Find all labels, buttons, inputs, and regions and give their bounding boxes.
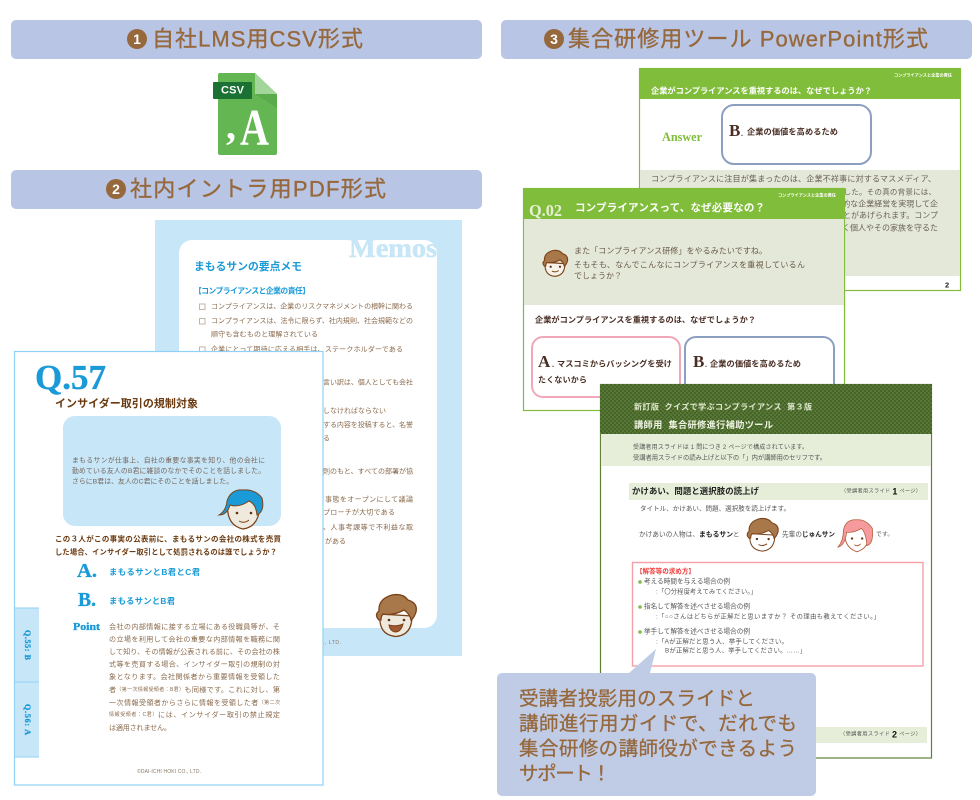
memo checklist xyxy=(200,302,413,546)
slide number: Q.02 xyxy=(529,201,562,220)
callout xyxy=(497,649,816,796)
page number: 2 xyxy=(945,280,949,290)
panel: memo page xyxy=(155,220,462,656)
point explanation: して知り、その情報が公表される前に、その会社の株 xyxy=(109,647,280,656)
explanation band xyxy=(640,170,960,276)
icon: woman with blue hair xyxy=(219,490,263,529)
choice B box: . xyxy=(705,360,707,369)
choice A: まもるサンとB君とC君 xyxy=(109,567,200,577)
memo checklist: 順守も含むものと理解されている xyxy=(211,330,318,338)
choice B: B. xyxy=(78,589,96,611)
slide question: 企業がコンプライアンスを重視するのは、なぜでしょうか？ xyxy=(651,86,872,96)
dialogue band xyxy=(524,219,844,305)
scenario box: さらにB君は、友人のC君にそのことを話しました。 xyxy=(72,476,233,486)
memo checklist: する内容を投稿すると、名誉 xyxy=(323,420,413,429)
guide header: 新訂版 クイズで学ぶコンプライアンス 第３版 xyxy=(634,402,812,412)
copyright: ©DAI-ICHI HOKI CO., LTD. xyxy=(137,768,201,775)
characters sentence: 先輩の xyxy=(782,530,802,538)
icon: CSV file: A xyxy=(240,100,269,157)
icon: boy face xyxy=(376,595,416,636)
memo checklist: 、人事考課等で不利益な取 xyxy=(323,522,413,532)
answer tab Q56 xyxy=(15,682,39,757)
memo checklist: 企業にとって期待に応える相手は、ステークホルダーである xyxy=(211,344,403,354)
question text xyxy=(55,534,282,556)
answer method box xyxy=(632,562,923,666)
section row xyxy=(629,483,928,500)
explanation band: コンプライアンスに注目が集まったのは、企業不祥事に対するマスメディア、 xyxy=(651,174,936,184)
point explanation: 式等を売買する場合、インサイダー取引の規制の対 xyxy=(109,660,280,668)
answer tab Q55 xyxy=(15,608,39,682)
callout: 講師進行用ガイドで、だれでも xyxy=(519,713,797,735)
question text: この３人がこの事実の公表前に、まもるサンの会社の株式を売買 xyxy=(55,534,282,544)
characters sentence: かけあいの人物は、 xyxy=(639,530,699,538)
question text: した場合、インサイダー取引として処罰されるのは誰でしょうか？ xyxy=(55,548,277,556)
answer tab Q56: Q.56: A xyxy=(23,704,32,735)
point label: Point xyxy=(73,621,100,633)
question title: インサイダー取引の規制対象 xyxy=(55,396,198,410)
second section row: （受講者用スライド 2 ページ） xyxy=(840,730,921,740)
memo title: まもるサンの要点メモ xyxy=(194,259,302,273)
guide intro band xyxy=(601,434,931,466)
point explanation: 会社の内部情報に接する立場にある役職員等が、そ xyxy=(109,622,280,631)
memo checklist: 則のもと、すべての部署が協 xyxy=(323,466,413,476)
heading: 2 intranet PDF format: 社内イントラ用PDF形式 xyxy=(130,176,386,202)
point explanation: は適用されません。 xyxy=(109,723,171,732)
answer method box: :「Aが正解だと思う人、挙手してください。 xyxy=(656,636,788,646)
choice B box: B xyxy=(693,352,704,371)
icon: CSV file: , xyxy=(226,103,236,148)
choice A box xyxy=(532,337,680,397)
second section row xyxy=(629,727,927,743)
memo checklist: る xyxy=(323,434,330,442)
answer method box: 【解答等の求め方】 xyxy=(636,566,695,576)
memo checklist: 事態をオープンにして議論 xyxy=(325,494,413,504)
icon: mamoru face xyxy=(747,518,778,551)
memo checklist: しなければならない xyxy=(323,406,386,415)
point explanation: 一次情報受領者からさらに情報を受領した者（第二次 xyxy=(109,698,280,707)
guide intro band: 受講者用スライドの読み上げと以下の「」内が講師用のセリフです。 xyxy=(633,452,826,462)
panel: instructor guide page xyxy=(600,384,932,758)
choice A: A. xyxy=(77,560,97,582)
choice A xyxy=(77,560,200,582)
memo checklist: プローチが大切である xyxy=(323,508,395,516)
answer method box: Bが正解だと思う人、挙手してください。……」 xyxy=(665,646,806,654)
scenario box xyxy=(63,416,281,526)
point explanation: 情報受領者：C君）には、インサイダー取引の禁止規定 xyxy=(109,710,280,719)
explanation band: く個人やその家族を守るた xyxy=(842,222,938,232)
question number: Q.57 xyxy=(35,358,106,397)
callout: 受講者投影用のスライドと xyxy=(519,688,755,710)
memo checklist: 言い訳は、個人としても会社 xyxy=(323,378,413,386)
panel: Q57 quiz page xyxy=(14,352,323,785)
memo checklist: コンプライアンスは、企業のリスクマネジメントの根幹に関わる xyxy=(211,302,413,310)
answer method box: 考える時間を与える場合の例 xyxy=(644,576,730,586)
memo copyright: ., LTD. xyxy=(323,640,341,646)
dialogue band: また「コンプライアンス研修」をやるみたいですね。 xyxy=(574,246,767,256)
explanation band: 消費者、投資家などからの批判が高まったことがありました。その真の背景には、 xyxy=(651,186,936,196)
choice A box: . xyxy=(552,360,554,369)
point explanation: 象となります。会社関係者から重要情報を受領した xyxy=(109,672,280,681)
panel: question slide xyxy=(523,188,845,410)
answer box: . xyxy=(741,129,743,138)
slide title: コンプライアンスって、なぜ必要なの？ xyxy=(575,201,765,214)
answer tab Q55: Q.55: B xyxy=(23,630,32,661)
answer method box: 挙手して解答を述べさせる場合の例 xyxy=(644,626,750,636)
slide question: 企業がコンプライアンスを重視するのは、なぜでしょうか？ xyxy=(535,314,756,324)
memos watermark: Memos xyxy=(349,233,437,263)
memo section heading: 【コンプライアンスと企業の責任】 xyxy=(194,286,310,296)
choice A box: A xyxy=(538,352,551,371)
icon: CSV file: CSV xyxy=(221,84,245,96)
point explanation: の立場を利用して会社の重要な内部情報を職務に関 xyxy=(109,634,280,644)
guide instructions: タイトル、かけあい、問題、選択肢を読上げます。 xyxy=(640,504,790,512)
dialogue band: でしょうか？ xyxy=(574,272,622,280)
answer method box: 指名して解答を述べさせる場合の例 xyxy=(644,602,750,610)
heading: 3 group training PowerPoint format xyxy=(501,20,972,59)
slide running label: コンプライアンスと企業の責任 xyxy=(778,192,837,198)
characters sentence: まもるサン xyxy=(699,530,733,538)
explanation band: とがあげられます。コンプ xyxy=(843,210,938,220)
memo checklist: がある xyxy=(325,536,346,546)
heading: 1 LMS CSV format xyxy=(11,20,482,59)
answer box: 企業の価値を高めるため xyxy=(747,126,838,136)
answer method box: :「○○さんはどちらが正解だと思いますか？ その理由も教えてください。」 xyxy=(656,612,880,620)
choice B box: 企業の価値を高めるため xyxy=(710,358,801,368)
answer box xyxy=(722,105,871,164)
characters sentence: じゅんサン xyxy=(802,530,835,538)
characters sentence: と xyxy=(733,530,739,538)
point explanation: 者（第一次情報受領者：B君）も同様です。これに対し、第 xyxy=(109,685,280,694)
dialogue band: そもそも、なんでこんなにコンプライアンスを重視しているん xyxy=(574,260,805,270)
heading: 1 LMS CSV format: 自社LMS用CSV形式 xyxy=(152,26,363,52)
choice B xyxy=(78,589,175,611)
heading: 2 intranet PDF format: 2 xyxy=(112,181,120,197)
section row: （受講者用スライド 1 ページ） xyxy=(841,486,921,496)
characters sentence: です。 xyxy=(876,531,893,538)
choice A box: マスコミからバッシングを受け xyxy=(557,358,672,368)
section row: かけあい、問題と選択肢の読上げ xyxy=(632,486,760,496)
guide header: 講師用 集合研修進行補助ツール xyxy=(634,419,773,430)
icon: jun face xyxy=(838,520,873,552)
characters sentence xyxy=(639,530,893,538)
choice B: まもるサンとB君 xyxy=(109,596,175,606)
scenario box: 勤めている友人のB君に雑談のなかでそのことを話しました。 xyxy=(72,466,265,475)
scenario box: まもるサンが仕事上、自社の重要な事実を知り、他の会社に xyxy=(72,456,265,464)
choice B box xyxy=(685,337,834,397)
panel: answer slide xyxy=(639,68,961,290)
icon: CSV file xyxy=(213,73,277,157)
point explanation xyxy=(109,622,280,732)
memo checklist: コンプライアンスは、法令に限らず、社内規則、社会規範などの xyxy=(211,316,413,325)
guide header xyxy=(600,384,932,434)
answer label: Answer xyxy=(662,129,702,144)
heading: 3 group training PowerPoint format: 集合研修用ツール PowerPoint形式 xyxy=(568,26,928,52)
guide intro band: 受講者用スライドは 1 問につき 2 ページで構成されています。 xyxy=(633,443,808,451)
choice A box: たくないから xyxy=(538,374,587,384)
slide running label: コンプライアンスと企業の責任 xyxy=(894,72,953,78)
icon: boy face small xyxy=(543,250,568,276)
heading: 2 intranet PDF format xyxy=(11,170,482,209)
answer method box: :「〇分程度考えてみてください。」 xyxy=(656,586,757,596)
callout: 集合研修の講師役ができるよう xyxy=(519,738,797,760)
callout: サポート！ xyxy=(519,763,611,785)
answer box: B xyxy=(729,121,740,140)
explanation band: 的な企業経営を実現して企 xyxy=(842,198,938,208)
heading: 3 group training PowerPoint format: 3 xyxy=(550,31,558,47)
heading: 1 LMS CSV format: 1 xyxy=(133,31,141,47)
